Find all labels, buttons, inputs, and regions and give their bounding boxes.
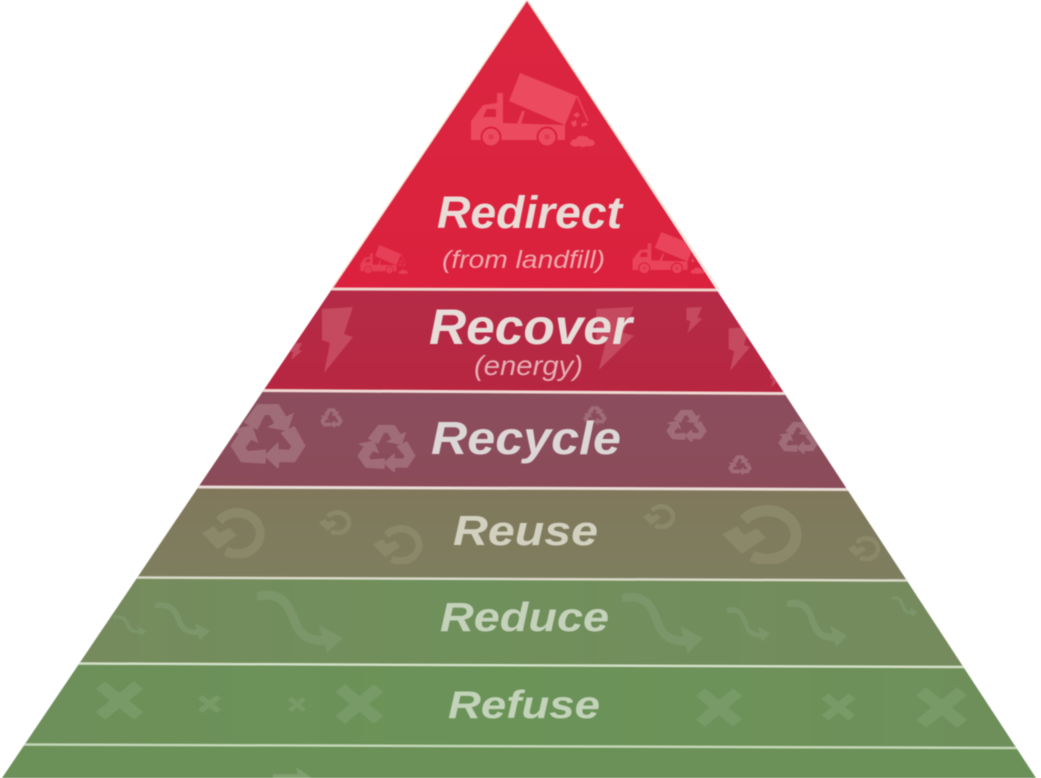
icon: cross right small (825, 696, 852, 718)
icon: recycle tiny (728, 455, 752, 475)
icon: recycle far right (778, 422, 818, 454)
icon: lightning bolt edge left (290, 343, 302, 360)
icon: lightning bolt small top right (686, 307, 702, 333)
icon: partial arrow (273, 767, 312, 778)
icon: lightning bolt edge right (770, 374, 776, 386)
panel: reuse band (138, 488, 906, 580)
panel: redirect band (332, 1, 717, 290)
icon: undo arrow left (202, 513, 260, 554)
icon: winding arrow left medium (157, 605, 210, 640)
heading: reduce: Reduce (440, 594, 609, 640)
icon: undo arrow edge (848, 538, 878, 559)
icon: lightning bolt right (729, 327, 750, 371)
heading: recover: Recover (429, 299, 635, 355)
icon: cross large center (340, 688, 379, 720)
icon: small dump truck left (360, 245, 408, 274)
icon: winding arrow far left (114, 617, 147, 636)
icon: winding arrow edge (893, 598, 917, 617)
icon: cross right large (700, 692, 738, 723)
icon: undo arrow medium (373, 529, 419, 561)
heading: recycle: Recycle (431, 412, 621, 464)
icon: recycle small (320, 408, 343, 428)
icon: winding arrow right (789, 603, 847, 647)
icon: cross far right (921, 691, 962, 724)
sub-label: energy: (energy) (474, 350, 583, 381)
band divider lines (22, 289, 1018, 748)
icon: cross small (200, 697, 218, 711)
pyramid upper edge highlight (333, 0, 719, 290)
heading: reuse: Reuse (453, 507, 598, 554)
panel: refuse band (0, 663, 1041, 748)
icon: recycle medium (358, 424, 416, 472)
icon: lightning bolt large left (322, 307, 353, 373)
heading: refuse: Refuse (448, 684, 600, 727)
icon: recycle right (666, 410, 707, 442)
icon: undo arrow large right (722, 511, 796, 559)
icon: winding arrow right medium (728, 610, 770, 642)
icon: lightning bolt center (596, 307, 634, 370)
icon: winding arrow right large (625, 597, 703, 653)
icon: recycle center (583, 406, 607, 425)
sub-label: from landfill: (from landfill) (442, 246, 605, 274)
panel: recover band (263, 289, 784, 393)
panel: bottom band (0, 744, 1041, 778)
icon: recycle large (230, 404, 306, 468)
icon: cross left large (100, 685, 139, 716)
heading: redirect: Redirect (437, 187, 624, 238)
icon: cross small center (290, 698, 304, 711)
panel: reduce band (80, 578, 963, 666)
icon: small dump truck right (633, 232, 705, 274)
icon: winding arrow left large (260, 595, 343, 653)
icon: undo arrow small (319, 512, 349, 533)
icon: undo arrow top right (643, 506, 673, 527)
icon: large dump truck (471, 73, 595, 147)
panel: recycle band (198, 391, 847, 489)
